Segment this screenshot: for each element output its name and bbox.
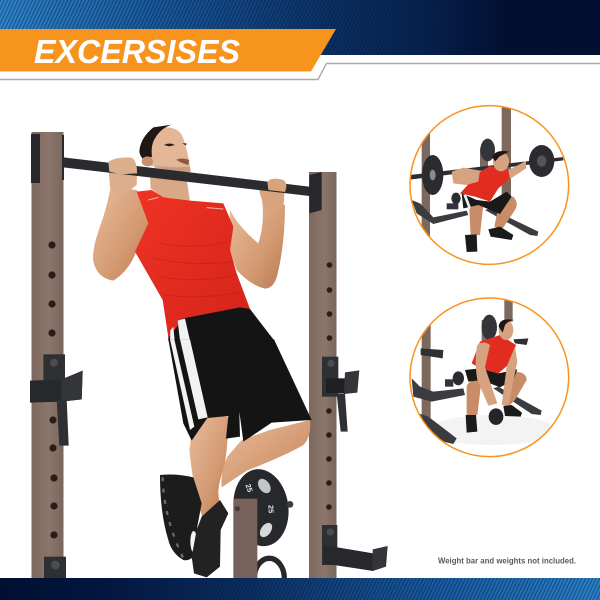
plate and storage peg behind leg [229,466,293,598]
raised shoe sole [160,475,202,560]
disclaimer note: Weight bar and weights not included. [438,556,576,566]
shorts waistband section [168,307,274,341]
squatting man [452,151,526,252]
left hand palm [108,165,137,193]
right bar bracket [309,172,322,213]
plate and storage peg behind leg: 25 [243,483,255,493]
squatting man [465,319,527,433]
rear leg [221,420,310,487]
circle photo: kettlebell squat [410,298,569,457]
right lower safety arm [322,525,388,571]
rack frame [412,298,542,444]
main photo: man doing pull-ups on power rack [30,125,388,598]
plate and storage peg behind leg: 25 [266,505,275,513]
rack frame [412,105,538,237]
head [139,125,191,175]
left upper J-hook [30,354,83,446]
circle photo: barbell squat [410,105,569,264]
man upper body [63,125,322,341]
floor shadow [430,415,557,445]
black shorts [168,339,312,442]
shorts white stripes [170,339,208,430]
right arm [229,200,285,289]
red tank top [135,190,250,337]
man lower body and rack hardware [30,339,388,578]
title banner [0,29,336,72]
rack posts [31,132,336,578]
footer band [0,578,600,600]
title: EXCERSISES [34,34,240,71]
orange ring [410,298,569,457]
orange ring [410,106,569,264]
neck [150,175,190,202]
right upper J-hook [322,357,359,432]
header band [0,0,600,55]
gap between sole and shoe [190,531,197,552]
left arm [93,187,149,281]
barbell [410,145,563,195]
left hand fingers [108,157,137,174]
left lower plate [44,557,66,578]
second shoe [192,500,228,577]
right hand palm [259,185,285,212]
divider line under header [0,64,600,80]
sole tread [163,477,183,558]
right hand fingers [267,179,286,192]
pull-up bar [63,157,318,197]
front leg [189,415,228,518]
